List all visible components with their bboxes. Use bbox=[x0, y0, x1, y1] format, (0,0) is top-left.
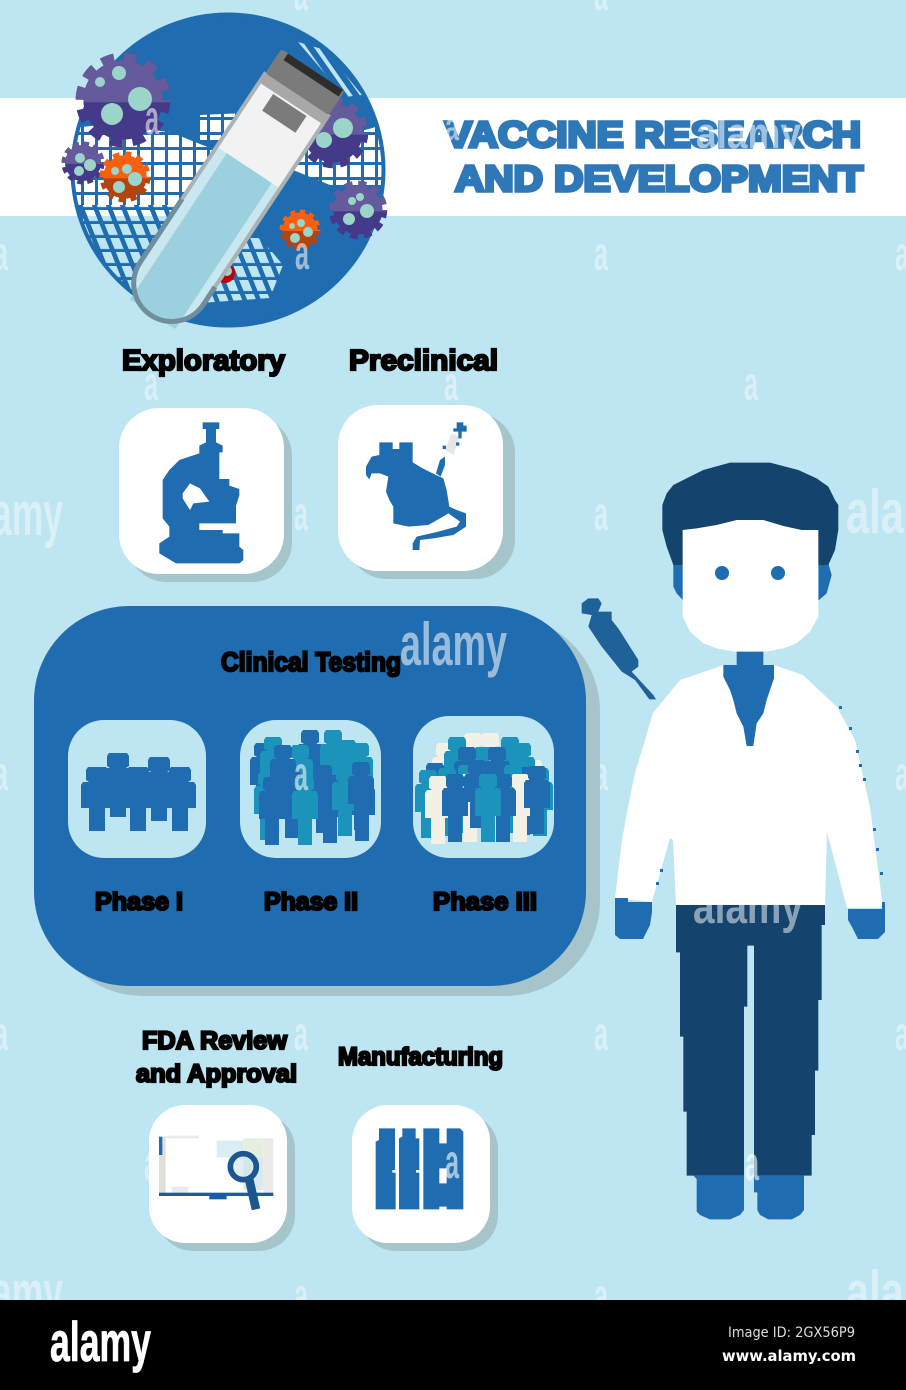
heading: Clinical Testing: Clinical Testing bbox=[221, 647, 401, 677]
card: phase I bbox=[68, 720, 206, 858]
globe bbox=[71, 13, 385, 327]
title watermark: a bbox=[445, 105, 459, 149]
panel: manufacturing card bbox=[352, 1105, 498, 1251]
background watermarks: a bbox=[294, 1008, 308, 1061]
icon: vaccine vials bbox=[376, 1128, 463, 1209]
shirt dots bbox=[656, 706, 883, 885]
title: VACCINE RESEARCH bbox=[445, 114, 861, 155]
figure watermark small: a bbox=[745, 1138, 759, 1191]
panel: exploratory card bbox=[119, 408, 292, 582]
footer logo: alamy bbox=[50, 1310, 151, 1373]
heading: Exploratory: Exploratory bbox=[122, 345, 285, 377]
label: Phase III: Phase III bbox=[433, 888, 537, 916]
panel: clinical testing bbox=[34, 606, 600, 996]
background watermarks: a bbox=[294, 1270, 308, 1323]
heading: FDA Review and Approval bbox=[136, 1027, 297, 1088]
heading: Manufacturing: Manufacturing bbox=[338, 1043, 503, 1071]
background watermarks: a bbox=[744, 358, 758, 411]
label: Phase I: Phase I bbox=[95, 888, 183, 916]
title watermark: alamy bbox=[696, 109, 801, 158]
shoes bbox=[693, 1176, 804, 1219]
background watermarks: a bbox=[594, 1270, 608, 1323]
icon: mouse with syringe bbox=[366, 422, 467, 550]
person: scientist figure bbox=[615, 463, 885, 1219]
background watermarks: a bbox=[144, 358, 158, 411]
hair bbox=[662, 463, 838, 565]
globe watermarks: a bbox=[145, 92, 159, 145]
heading: FDA Review and Approval: and Approval bbox=[136, 1060, 297, 1088]
hero: globe with viruses and test tube bbox=[64, 13, 385, 337]
website: www.alamy.com bbox=[722, 1347, 856, 1365]
panel: FDA card bbox=[149, 1105, 295, 1251]
panel watermarks bbox=[294, 611, 507, 801]
panel: preclinical card bbox=[338, 405, 515, 579]
title watermark bbox=[445, 105, 801, 158]
icon: phase III people bbox=[415, 733, 553, 844]
footer bar bbox=[0, 1300, 906, 1390]
globe watermarks: a bbox=[295, 227, 309, 280]
panel watermarks: alamy bbox=[400, 611, 507, 678]
icon: phase II people bbox=[250, 730, 375, 845]
background watermarks: a bbox=[444, 358, 458, 411]
icon: small purple virus bbox=[64, 144, 102, 182]
title bbox=[445, 114, 863, 199]
icon: microscope bbox=[159, 422, 243, 563]
white title band bbox=[0, 98, 906, 216]
card: phase III bbox=[413, 716, 554, 858]
background watermarks: a bbox=[144, 1138, 158, 1191]
icon: orange virus bbox=[103, 155, 147, 199]
eyes bbox=[715, 566, 785, 580]
label: Phase II: Phase II bbox=[264, 888, 358, 916]
icon: phase I people bbox=[81, 753, 196, 831]
background watermarks: a bbox=[594, 228, 608, 281]
card: phase II bbox=[240, 720, 381, 858]
background watermarks: a bbox=[294, 488, 308, 541]
icon: large purple virus bbox=[82, 59, 164, 141]
ears bbox=[673, 563, 832, 601]
globe watermarks bbox=[145, 92, 309, 280]
background watermarks: a bbox=[594, 488, 608, 541]
collar and tie bbox=[723, 652, 774, 746]
heading: Preclinical: Preclinical bbox=[349, 345, 498, 377]
icon: syringe bbox=[582, 598, 656, 699]
icon: purple virus behind tube bbox=[303, 103, 363, 163]
icon: lower right purple virus bbox=[333, 185, 383, 235]
panel watermarks: a bbox=[294, 748, 308, 801]
figure watermark: alamy bbox=[693, 881, 803, 934]
watermark on vials: a bbox=[445, 1136, 459, 1189]
icon: test tube bbox=[117, 48, 346, 337]
icon: red virus bbox=[215, 263, 235, 283]
heading: FDA Review and Approval: FDA Review bbox=[142, 1027, 288, 1055]
hands bbox=[615, 898, 885, 939]
shirt bbox=[615, 665, 883, 908]
background watermarks: a bbox=[594, 1008, 608, 1061]
icon: open book with magnifier bbox=[159, 1136, 273, 1209]
background watermarks: a bbox=[594, 748, 608, 801]
face bbox=[683, 520, 818, 652]
trousers bbox=[676, 905, 825, 1176]
image id: Image ID: 2GX56P9 bbox=[728, 1325, 855, 1341]
title: AND DEVELOPMENT bbox=[455, 158, 863, 199]
background watermarks: a bbox=[144, 618, 158, 671]
icon: small orange virus bbox=[282, 212, 318, 248]
